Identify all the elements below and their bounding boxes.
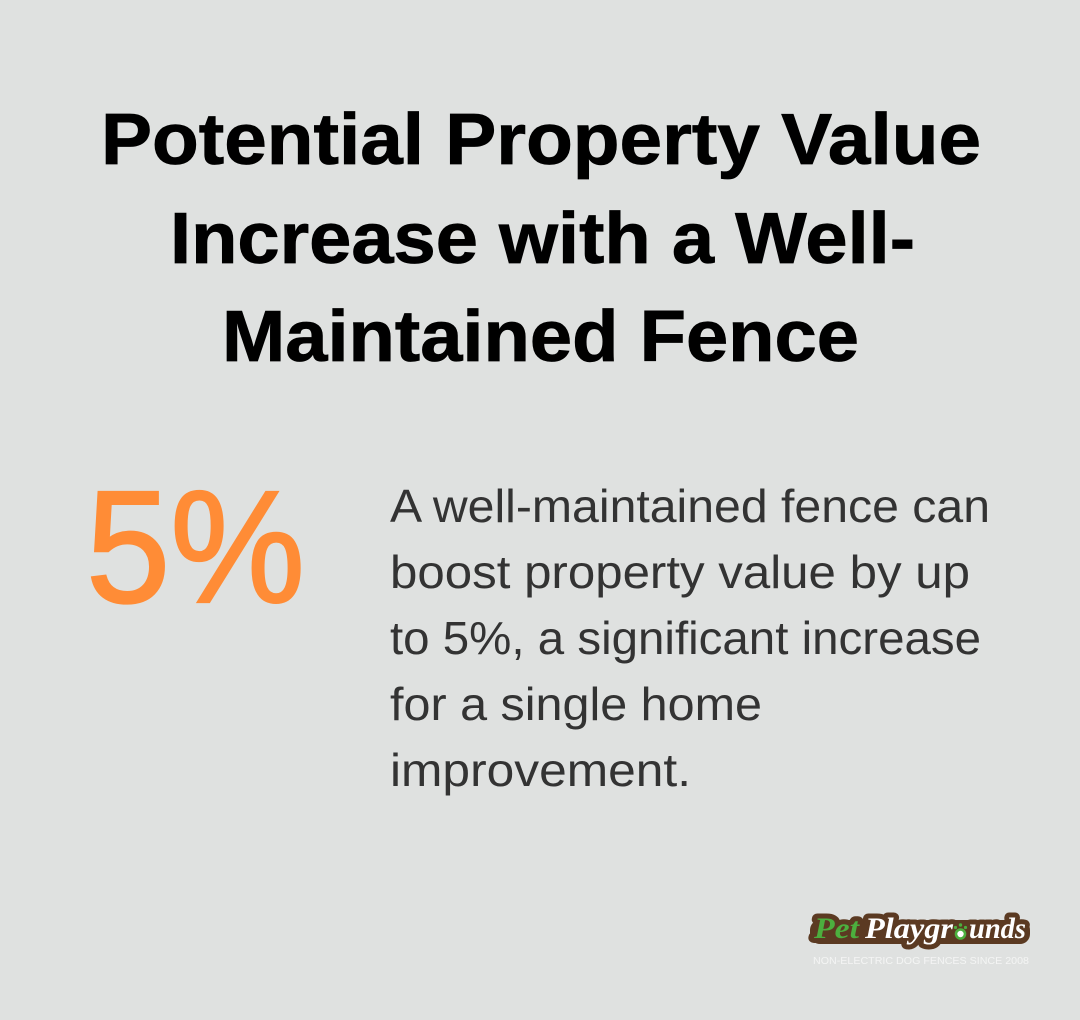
logo wordmark: unds bbox=[969, 912, 1026, 945]
logo: Pet Playgrounds bbox=[810, 912, 1030, 967]
description text: A well-maintained fence can bbox=[390, 480, 990, 532]
logo wordmark bbox=[813, 912, 1026, 945]
description text: boost property value by up bbox=[390, 546, 970, 598]
logo backing shape bbox=[810, 920, 1030, 944]
description text bbox=[390, 480, 990, 796]
title: Maintained Fence bbox=[222, 297, 859, 377]
logo tagline: NON-ELECTRIC DOG FENCES SINCE 2008 bbox=[813, 955, 1029, 967]
description text: to 5%, a significant increase bbox=[390, 612, 981, 664]
title bbox=[101, 100, 981, 377]
title: Potential Property Value bbox=[101, 100, 981, 180]
logo wordmark: Playgr bbox=[864, 912, 953, 945]
logo wordmark: Pet bbox=[813, 912, 861, 945]
title: Increase with a Well- bbox=[170, 199, 915, 279]
description text: improvement. bbox=[390, 744, 691, 796]
big statistic: 5%: 5% bbox=[86, 457, 305, 636]
icon: paw in the letter o bbox=[954, 923, 967, 938]
description text: for a single home bbox=[390, 678, 762, 730]
